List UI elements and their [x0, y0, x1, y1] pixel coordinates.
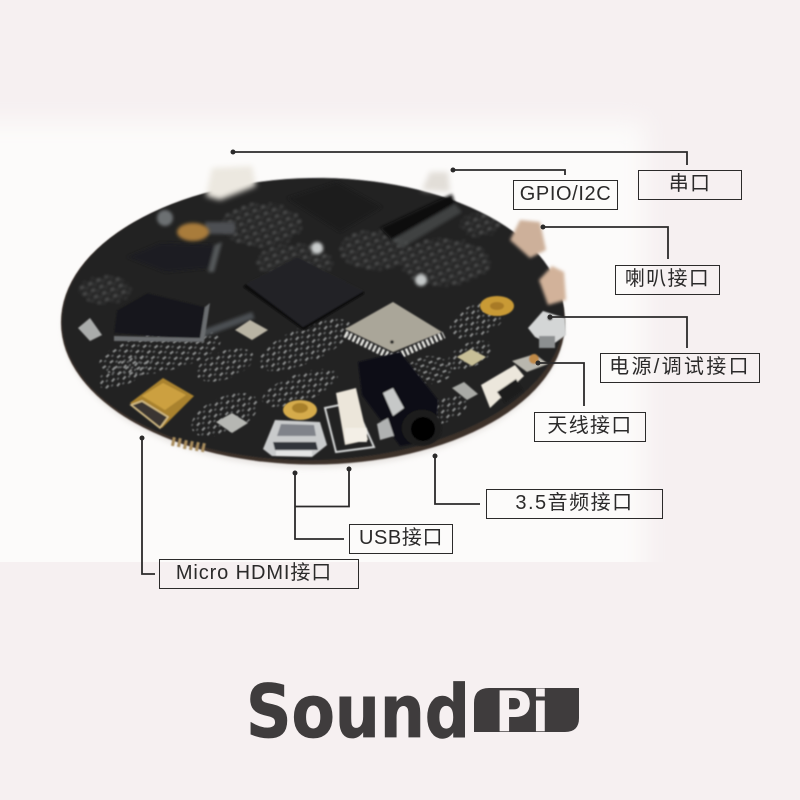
product photo of circuit board with connector leader lines	[0, 130, 688, 575]
label: serial port: 串口	[669, 173, 711, 195]
leader: USB	[292, 466, 352, 539]
label: antenna port: 天线接口	[547, 415, 633, 437]
label: serial port	[638, 170, 742, 200]
module: wifi shield	[345, 302, 444, 358]
micro USB power and debug port	[528, 311, 566, 348]
leader: speaker	[540, 224, 668, 259]
label: USB port: USB接口	[359, 527, 443, 549]
slide switch	[481, 365, 524, 408]
leader: Micro HDMI	[140, 436, 155, 574]
label: antenna port	[534, 412, 646, 442]
pin header	[380, 194, 462, 248]
circuit board	[60, 166, 566, 468]
board surface	[60, 174, 566, 464]
label: power and debug port	[600, 353, 760, 383]
gold edge contacts	[171, 437, 206, 452]
micro HDMI port	[130, 378, 194, 428]
logo badge: Pi: Pi	[495, 680, 549, 745]
label: Micro HDMI port: Micro HDMI接口	[176, 562, 332, 584]
antenna connector	[512, 354, 548, 372]
blurred highlights	[157, 210, 427, 337]
crystal components	[78, 318, 486, 433]
leader: power/debug	[548, 314, 687, 348]
top white connectors	[206, 166, 450, 200]
label: Micro HDMI port	[159, 559, 359, 589]
audio jack	[358, 352, 442, 446]
tan speaker connectors	[510, 220, 566, 305]
chip: left memory lower	[114, 293, 210, 342]
label: speaker port: 喇叭接口	[625, 268, 710, 290]
label: speaker port	[615, 265, 720, 295]
micro USB port	[263, 420, 327, 457]
board shadow and rim	[61, 180, 565, 468]
leader: 3.5 audio	[432, 454, 480, 504]
gold mounting pads	[177, 223, 514, 420]
white JST connector with outline	[325, 388, 374, 452]
logo word: Sound: Sound	[246, 670, 470, 755]
small surface-mounted components	[79, 203, 512, 446]
label: GPIO/I2C: GPIO/I2C	[520, 183, 611, 205]
label: 3.5 audio port	[486, 489, 663, 519]
leader: GPIO/I2C	[450, 168, 565, 175]
leader lines and dots	[140, 150, 687, 574]
chip: upper processor	[287, 182, 382, 232]
label: 3.5 audio port: 3.5音频接口	[515, 492, 634, 514]
chip: left memory upper	[127, 242, 222, 272]
label: USB port	[349, 524, 453, 554]
chip: main processor	[243, 257, 364, 331]
leader: antenna	[536, 360, 584, 406]
label: GPIO/I2C	[513, 180, 618, 210]
logo badge: Pi	[474, 680, 579, 745]
label: power and debug port: 电源/调试接口	[609, 356, 751, 378]
leader: serial port	[230, 150, 687, 165]
